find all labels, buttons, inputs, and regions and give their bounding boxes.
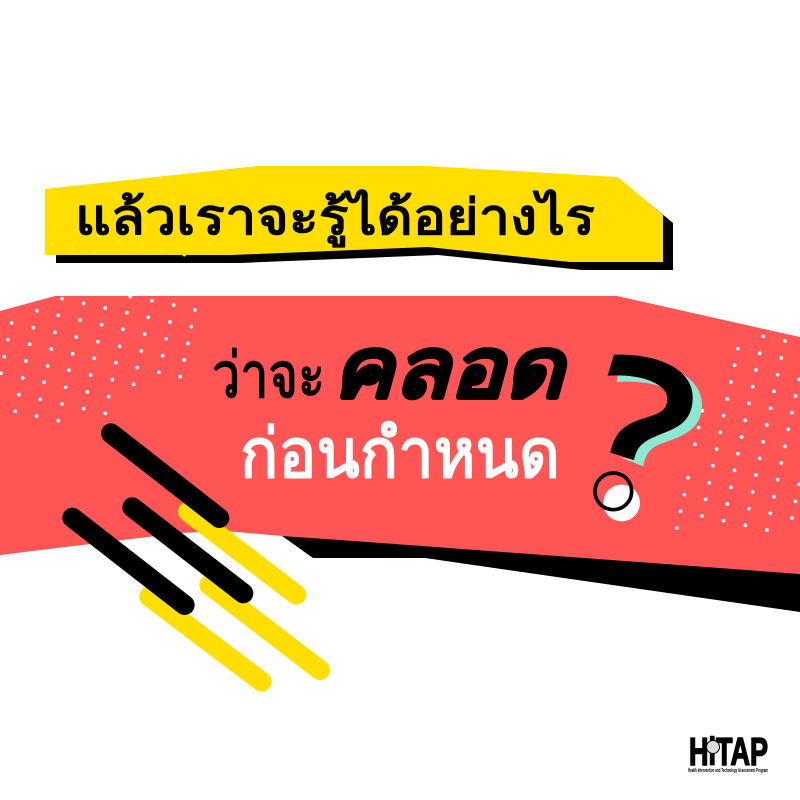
banner: yellow heading panel [45, 166, 673, 270]
decorative diagonal stripes [72, 433, 320, 682]
dots: right field [677, 336, 799, 530]
question mark hook [608, 355, 693, 460]
banner face [45, 166, 663, 262]
text: second line: ก่อนกำหนด [240, 416, 560, 492]
logo seal [706, 740, 720, 754]
yellow stripes [149, 512, 320, 682]
black stripes [72, 433, 243, 605]
dots: left field [1, 297, 195, 421]
band face [0, 296, 800, 574]
logo wordmark: HiTAP [689, 731, 768, 774]
banner speckle dots [51, 196, 213, 255]
icon: question mark [595, 355, 702, 521]
panel: red band [0, 296, 800, 612]
logo: HiTAP [688, 731, 768, 774]
heading text: แล้วเราจะรู้ได้อย่างไร [75, 189, 595, 247]
banner shadow [56, 186, 673, 270]
question mark ring [595, 473, 632, 510]
band shadow [282, 530, 800, 612]
question mark white dot [603, 485, 640, 521]
text: emphasised word: คลอด [332, 321, 568, 415]
text: lead-in phrase: ว่าจะ [212, 341, 325, 411]
question mark teal shadow [617, 373, 702, 466]
